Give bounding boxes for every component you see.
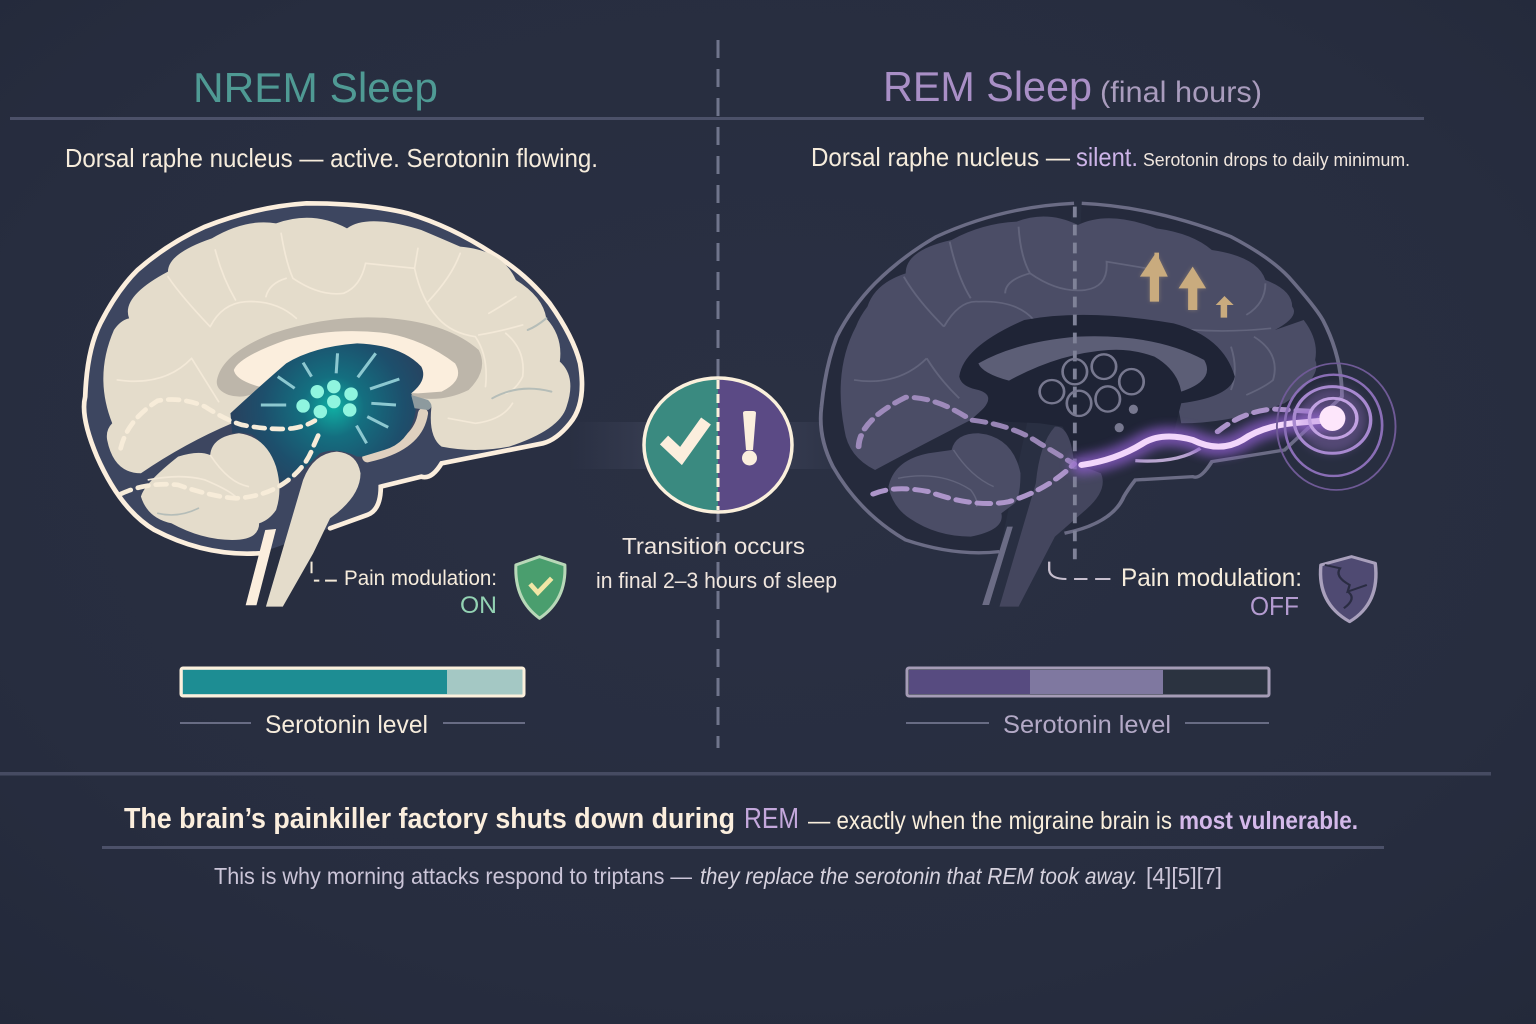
headline: — exactly when the migraine brain is bbox=[808, 807, 1172, 835]
text: dorsal raphe silent: Dorsal raphe nucleus — bbox=[811, 142, 1070, 172]
brain: active bbox=[84, 203, 582, 618]
footnote: This is why morning attacks respond to triptans — bbox=[214, 863, 692, 889]
transition badge bbox=[643, 377, 793, 513]
connector bbox=[312, 562, 337, 581]
heading: REM Sleep: (final hours) bbox=[1100, 76, 1262, 109]
serotonin bar: low bbox=[907, 668, 1269, 696]
brain outline bbox=[84, 203, 582, 554]
heading: REM Sleep: REM Sleep bbox=[883, 63, 1092, 110]
corpus callosum bbox=[978, 336, 1207, 392]
neuron cluster bbox=[296, 380, 358, 418]
text: transition note bbox=[596, 533, 837, 593]
text: transition note: Transition occurs bbox=[622, 533, 805, 559]
footnote: they replace the serotonin that REM took away. bbox=[700, 863, 1138, 889]
dashed pathways bbox=[859, 397, 1315, 504]
connector bbox=[1049, 562, 1110, 579]
corpus callosum bbox=[217, 317, 482, 399]
panel: REM sleep bbox=[811, 63, 1410, 739]
pain target rings bbox=[1277, 363, 1396, 490]
text: dorsal raphe silent: silent. bbox=[1076, 142, 1138, 172]
serotonin bar: high bbox=[181, 668, 524, 696]
brainstem bbox=[999, 427, 1103, 607]
label: pain modulation on bbox=[344, 567, 497, 619]
text: dorsal raphe silent: Serotonin drops to daily minimum. bbox=[1143, 150, 1410, 170]
cerebellum bbox=[888, 433, 1020, 537]
text: dorsal raphe active: Dorsal raphe nucleus — active. Serotonin flowing. bbox=[65, 143, 598, 173]
rising arrows bbox=[1140, 253, 1234, 318]
label: pain modulation on: ON bbox=[460, 592, 497, 619]
pain signal wave bbox=[1082, 420, 1330, 465]
rays bbox=[261, 353, 399, 443]
brainstem bbox=[266, 452, 361, 607]
cerebral cortex bbox=[841, 217, 1316, 470]
brain: silent bbox=[821, 203, 1396, 622]
footnote: [4][5][7] bbox=[1146, 863, 1222, 889]
raphe region glow bbox=[230, 343, 423, 483]
label: serotonin level: Serotonin level bbox=[1003, 711, 1171, 739]
cerebral cortex bbox=[103, 218, 570, 473]
fornix bbox=[367, 413, 423, 457]
headline bbox=[124, 803, 1358, 835]
cerebellum bbox=[141, 433, 279, 540]
label: pain modulation on: Pain modulation: bbox=[344, 567, 497, 590]
serotonin pathways bbox=[121, 400, 321, 498]
dark inner region bbox=[959, 315, 1235, 460]
text: dorsal raphe silent bbox=[811, 142, 1410, 172]
heading: NREM Sleep: NREM Sleep bbox=[193, 64, 438, 111]
footnote bbox=[214, 863, 1222, 889]
label: pain modulation off bbox=[1121, 564, 1302, 621]
headline: The brain’s painkiller factory shuts down during bbox=[124, 803, 735, 835]
shield: off bbox=[1321, 557, 1376, 622]
panel: NREM sleep bbox=[65, 64, 598, 739]
icon: exclamation bbox=[742, 411, 757, 466]
label: pain modulation off: OFF bbox=[1250, 591, 1299, 621]
headline: most vulnerable. bbox=[1179, 807, 1358, 835]
silent neurons bbox=[1040, 354, 1144, 416]
brain outline bbox=[821, 203, 1342, 553]
label: pain modulation off: Pain modulation: bbox=[1121, 564, 1302, 592]
central dashed line bbox=[1070, 207, 1080, 567]
text: transition note: in final 2–3 hours of sleep bbox=[596, 568, 837, 593]
heading: REM Sleep bbox=[883, 63, 1262, 110]
shield: on bbox=[516, 557, 565, 618]
icon: check bbox=[664, 421, 706, 456]
headline: REM bbox=[744, 803, 799, 835]
label: serotonin level: Serotonin level bbox=[265, 711, 428, 739]
